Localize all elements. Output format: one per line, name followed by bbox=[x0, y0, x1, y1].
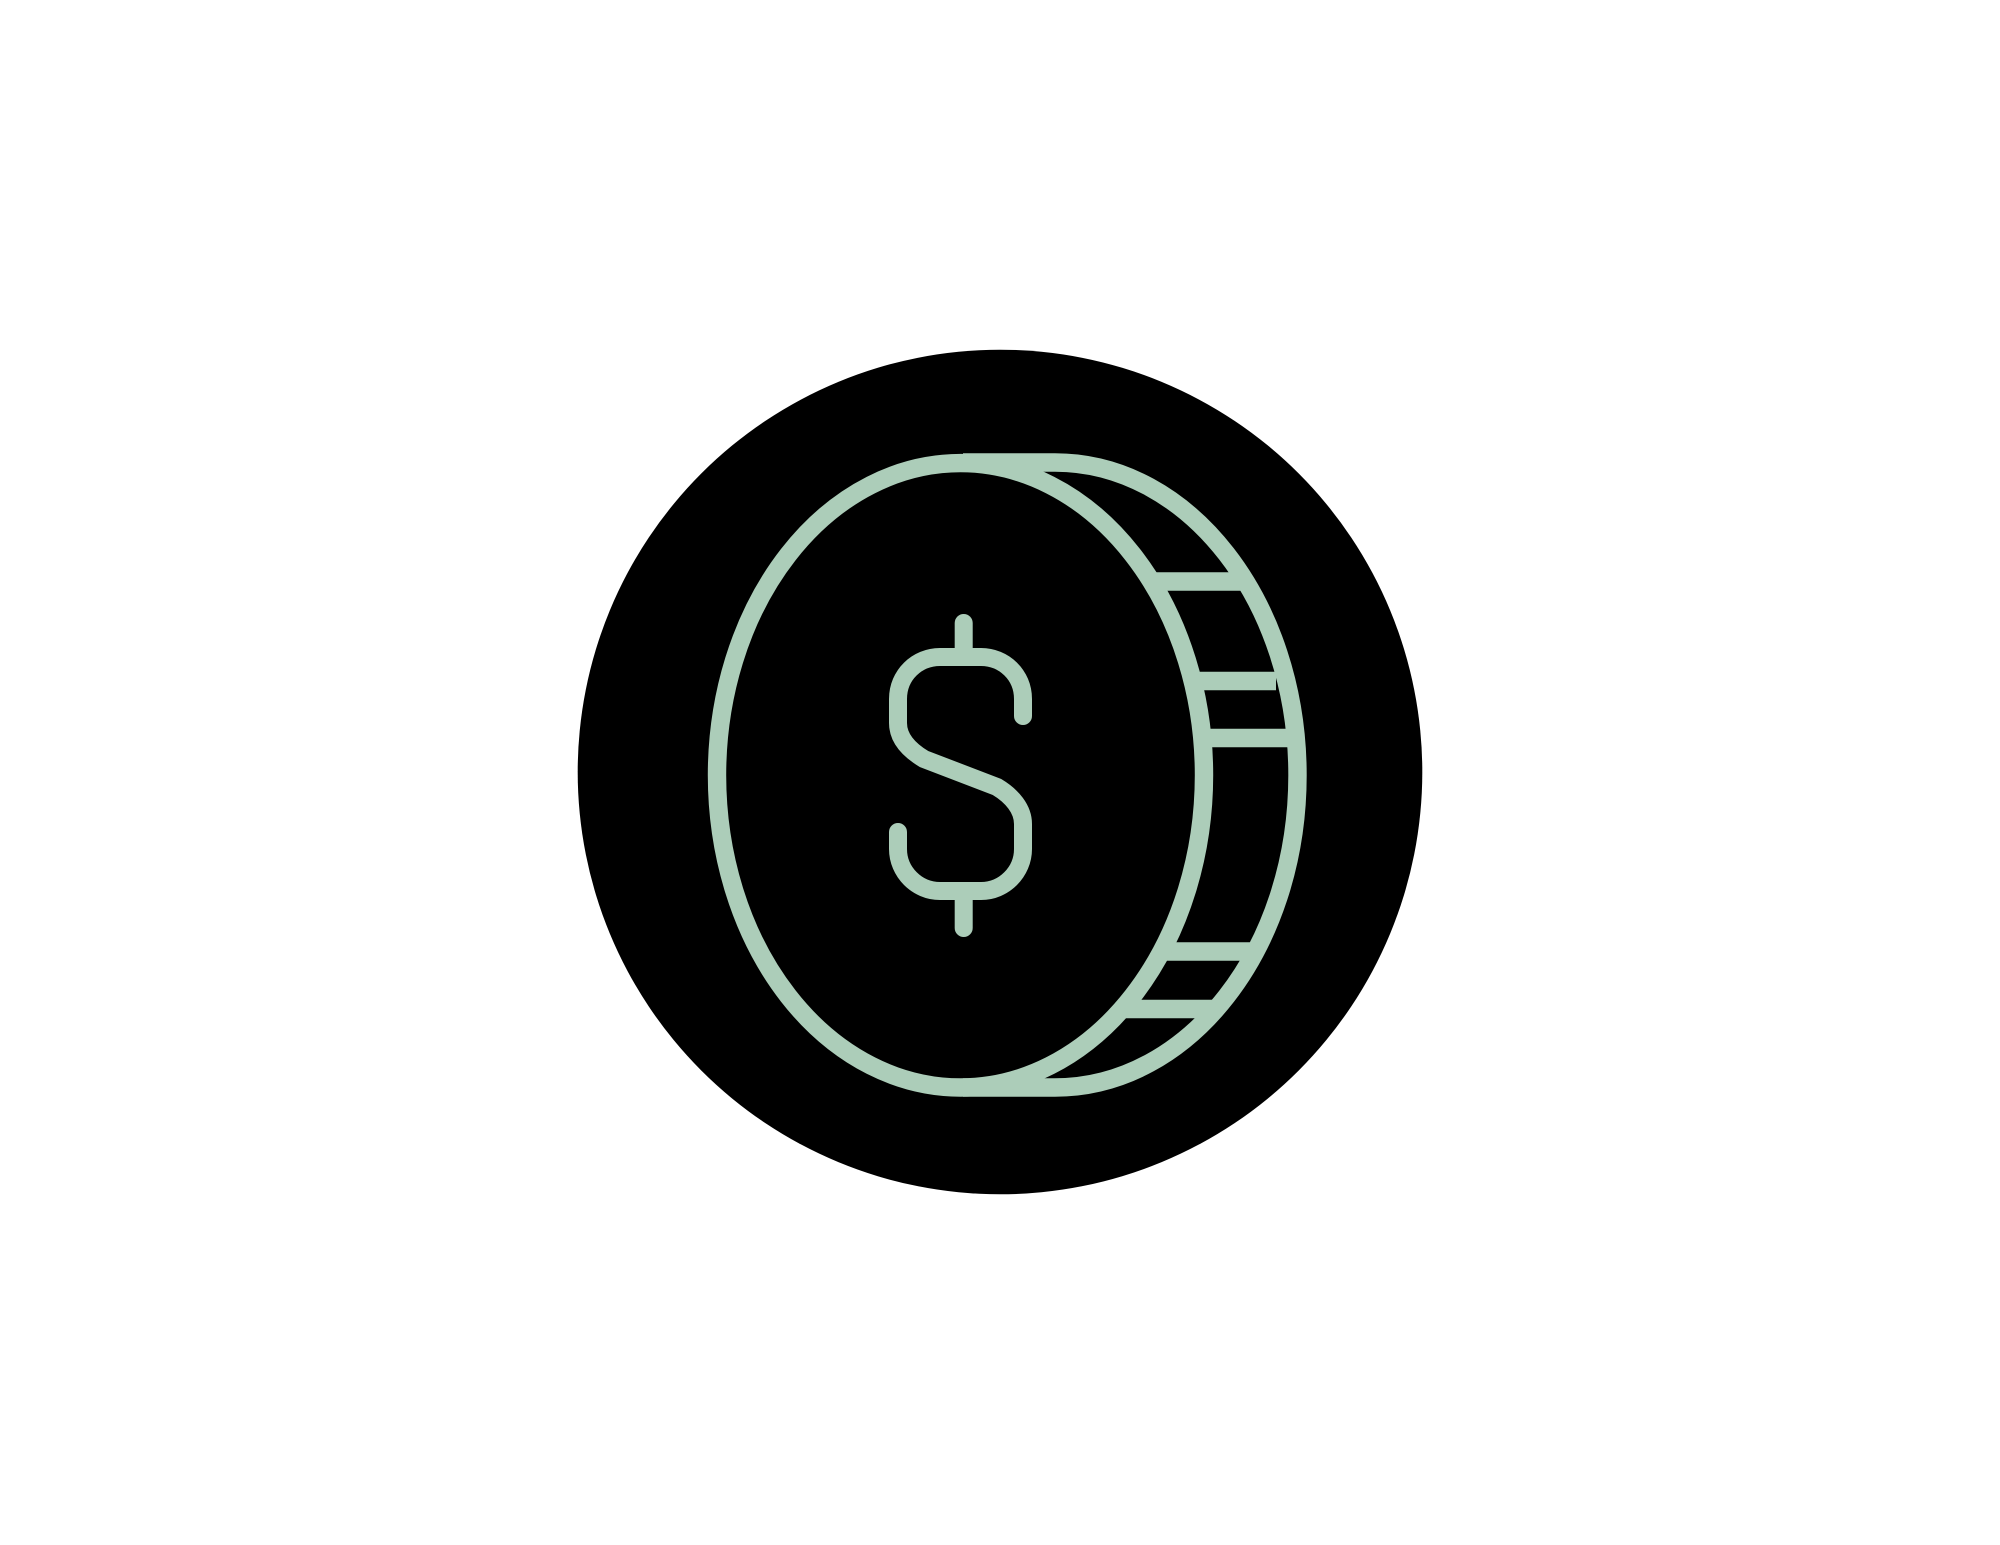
dollar sign bbox=[898, 623, 1023, 928]
coin back rim bbox=[963, 462, 1298, 1088]
coin bbox=[717, 462, 1298, 1088]
coin edge ridges bbox=[1124, 582, 1292, 1009]
coin front face bbox=[717, 463, 1204, 1088]
black circle background bbox=[578, 350, 1422, 1194]
